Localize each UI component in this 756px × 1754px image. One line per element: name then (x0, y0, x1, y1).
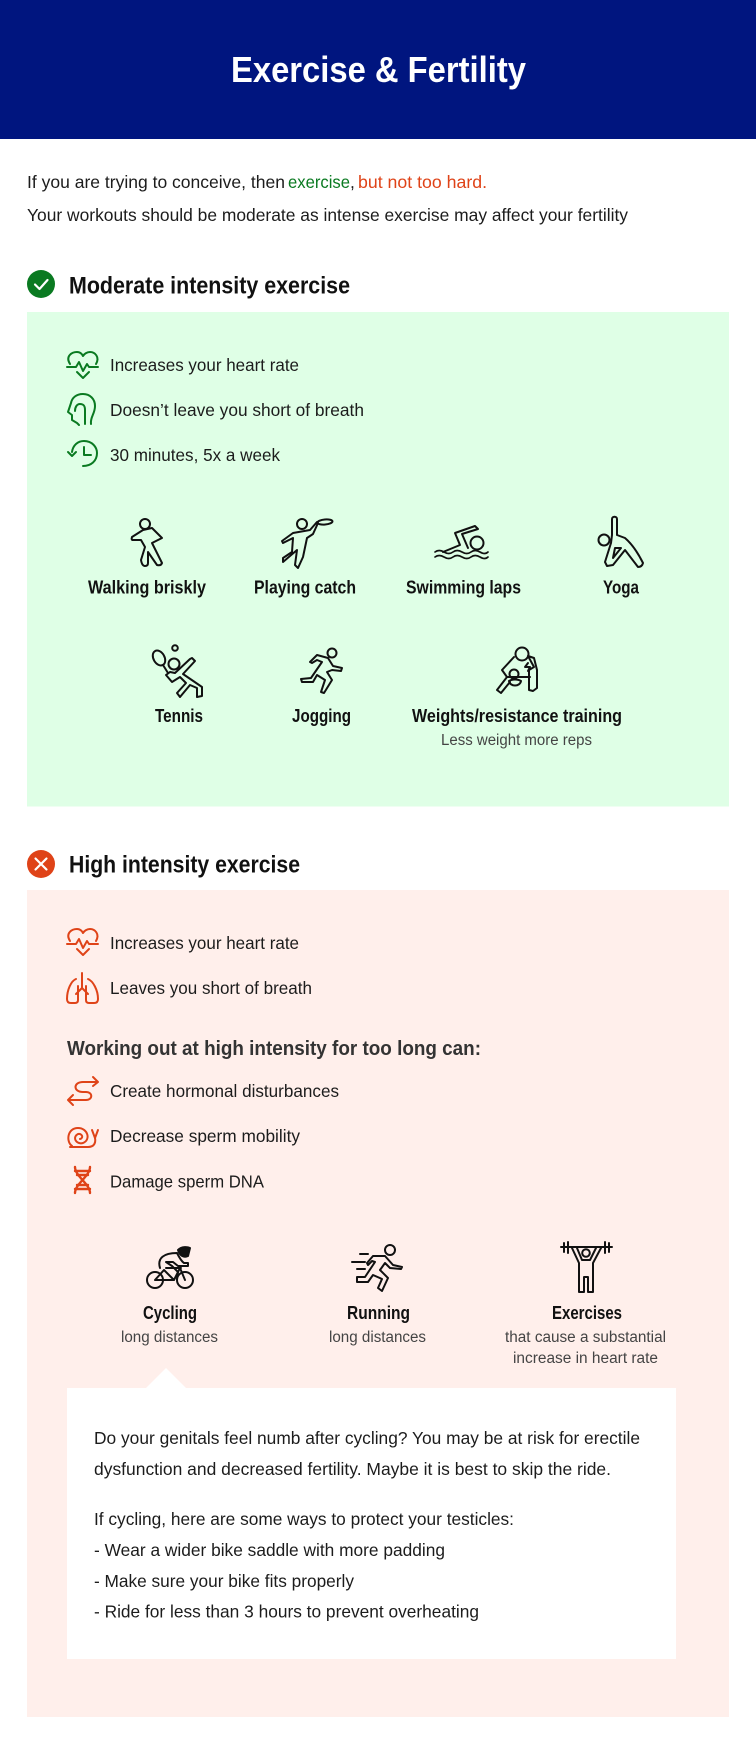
intro text: Your workouts should be moderate as intense exercise may affect your fertility (27, 205, 628, 225)
intro text: If you are trying to conceive, then (27, 172, 285, 192)
callout: cycling advice: dysfunction and decreased fertility. Maybe it is best to skip the ride. (94, 1459, 611, 1479)
bullet: heart rate (67, 352, 299, 378)
callout: cycling advice: If cycling, here are some ways to protect your testicles: (94, 1509, 514, 1529)
activity: weights: Weights/resistance training (412, 706, 622, 726)
icon: cyclist (147, 1247, 193, 1288)
bullet: breath (67, 973, 312, 1003)
subheading: Working out at high intensity for too long can: (67, 1037, 481, 1060)
activity: swimming (406, 526, 521, 598)
activity: exercises: Exercises (552, 1303, 622, 1323)
activity: running: Running (347, 1303, 410, 1323)
icon: frisbee thrower (282, 519, 333, 568)
bullet: heart rate: Increases your heart rate (110, 933, 299, 953)
title: Exercise & Fertility (231, 49, 526, 90)
icon: red cross (27, 850, 55, 878)
bullet: sperm DNA: Damage sperm DNA (110, 1172, 264, 1192)
bullet: breath: Doesn’t leave you short of breath (110, 400, 364, 420)
callout: cycling advice: - Make sure your bike fits properly (94, 1571, 354, 1591)
intro text: but not too hard. (358, 172, 487, 192)
intro text: exercise (288, 172, 350, 192)
activity: jogging: Jogging (292, 706, 351, 726)
icon: yoga pose (598, 517, 643, 567)
intro text (27, 172, 628, 225)
activity: weights: Less weight more reps (441, 732, 592, 749)
icon: jogger (301, 648, 342, 693)
icon: heart rate (67, 929, 98, 955)
icon: walker (132, 519, 162, 566)
callout: cycling advice: - Wear a wider bike saddle with more padding (94, 1540, 445, 1560)
panel: moderate intensity (27, 312, 729, 806)
activity: exercises (505, 1242, 666, 1367)
icon: clock with back arrow (68, 441, 97, 466)
icon: swimmer (435, 526, 488, 558)
activity: tennis: Tennis (155, 706, 203, 726)
bullet: breath (68, 394, 364, 425)
activity: jogging (292, 648, 351, 726)
icon: runner with speed lines (352, 1245, 402, 1291)
header banner (0, 0, 756, 139)
bullet: duration: 30 minutes, 5x a week (110, 445, 280, 465)
icon: green check (27, 270, 55, 298)
activity: exercises: increase in heart rate (513, 1350, 658, 1367)
activity: cycling: long distances (121, 1329, 218, 1346)
intro text: , (350, 172, 355, 192)
icon: heart rate (67, 352, 98, 378)
activity: running (329, 1245, 426, 1346)
icon: kettlebell lifter (497, 648, 537, 693)
heading: high intensity: High intensity exercise (69, 852, 300, 878)
icon: head with airway (68, 394, 95, 425)
callout: cycling advice (67, 1368, 676, 1659)
activity: weights (412, 648, 622, 749)
activity: catch (254, 519, 356, 598)
activity: tennis (150, 645, 203, 726)
callout: cycling advice: Do your genitals feel numb after cycling? You may be at risk for erectile (94, 1428, 640, 1448)
icon: winding arrows (68, 1077, 98, 1105)
icon: barbell lifter (561, 1242, 612, 1292)
activity: catch: Playing catch (254, 578, 356, 598)
bullet: heart rate: Increases your heart rate (110, 355, 299, 375)
panel: high intensity (27, 890, 729, 1717)
activity: running: long distances (329, 1329, 426, 1346)
activity: walking: Walking briskly (88, 578, 206, 598)
activity: cycling: Cycling (143, 1303, 197, 1323)
bullet: hormones: Create hormonal disturbances (110, 1081, 339, 1101)
activity: cycling (121, 1247, 218, 1346)
bullet: breath: Leaves you short of breath (110, 978, 312, 998)
icon: snail (68, 1128, 98, 1147)
icon: lungs (67, 973, 98, 1003)
icon: DNA helix (75, 1167, 90, 1193)
bullet: hormones (68, 1077, 339, 1105)
activity: yoga: Yoga (603, 578, 640, 598)
icon: tennis player (150, 645, 202, 697)
bullet: heart rate (67, 929, 299, 955)
activity: yoga (598, 517, 643, 598)
activity: walking (88, 519, 206, 598)
activity: swimming: Swimming laps (406, 578, 521, 598)
bullet: sperm DNA (75, 1167, 264, 1193)
bullet: sperm mobility: Decrease sperm mobility (110, 1126, 300, 1146)
activity: exercises: that cause a substantial (505, 1329, 666, 1346)
bullet: duration (68, 441, 280, 466)
callout: cycling advice: - Ride for less than 3 hours to prevent overheating (94, 1602, 479, 1622)
heading: moderate intensity: Moderate intensity exercise (69, 272, 350, 300)
